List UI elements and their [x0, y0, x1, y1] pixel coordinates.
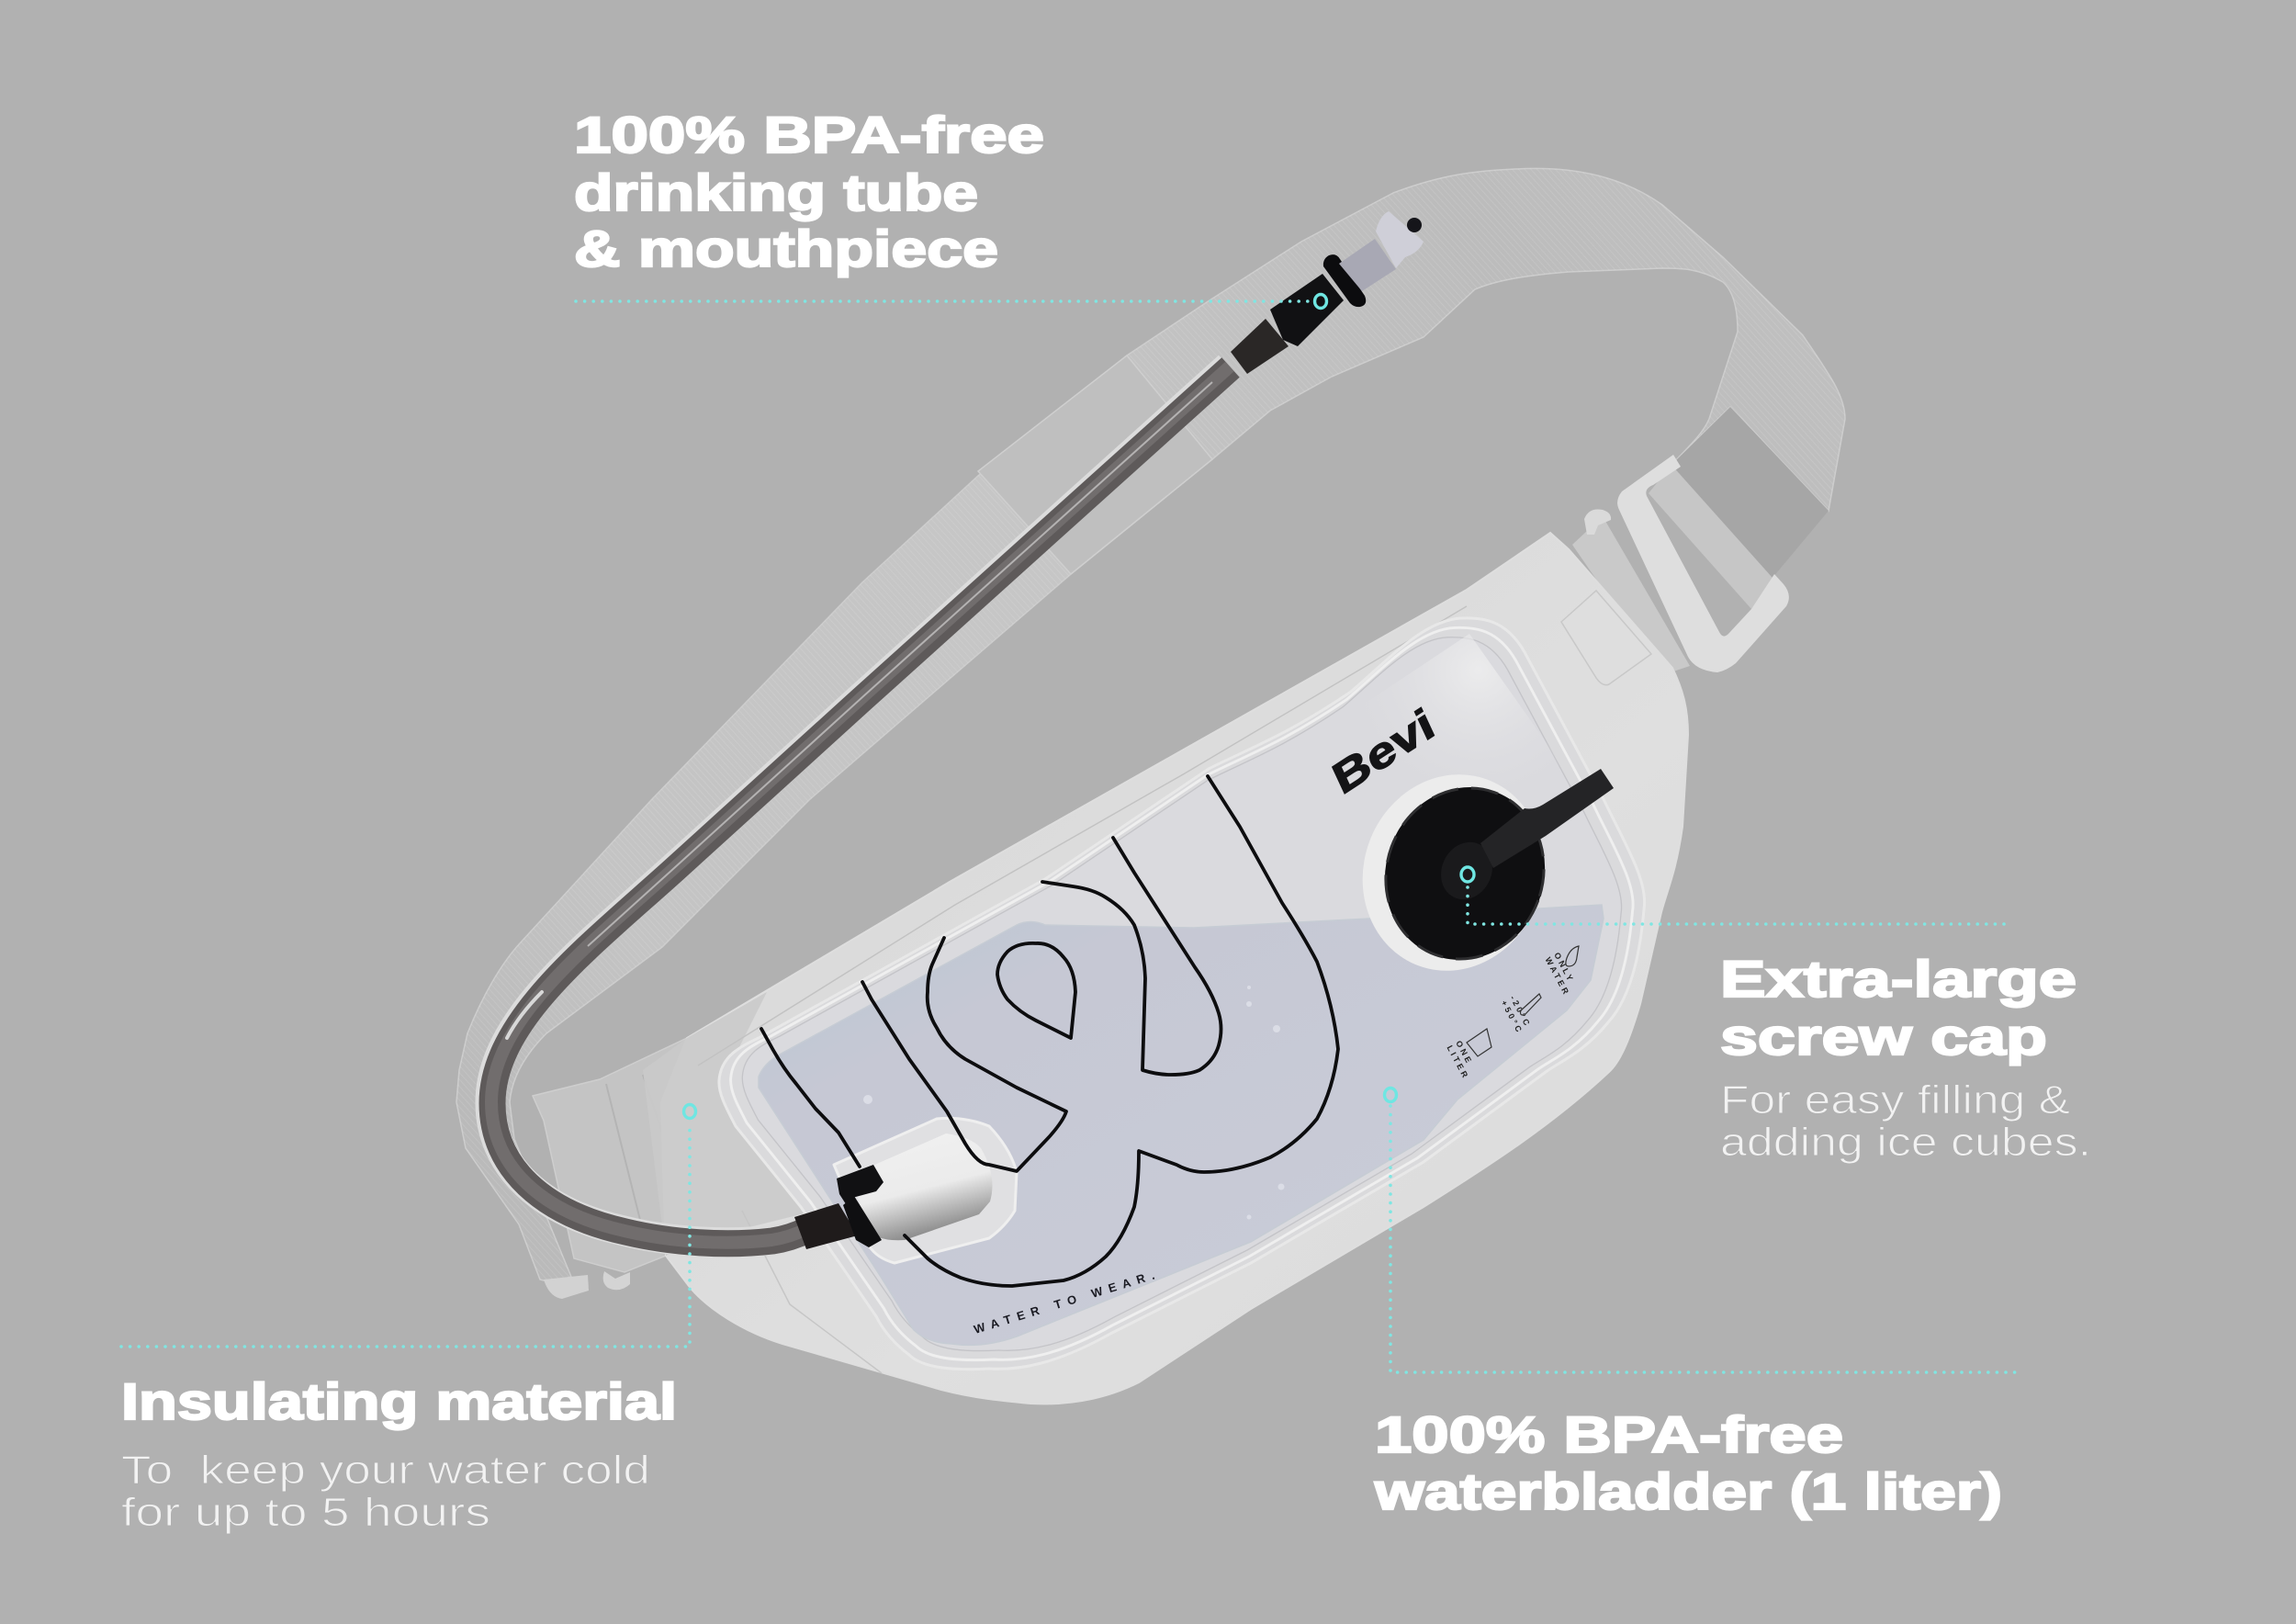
leader line	[576, 299, 1308, 303]
heading: Insulating material	[121, 1372, 677, 1430]
one liter: LITER	[1446, 1043, 1471, 1081]
Bevi logo: Bevi	[1325, 698, 1441, 804]
icon: measuring cup	[1467, 1029, 1491, 1056]
lower seam line	[742, 1211, 882, 1373]
icon: water drop	[1566, 946, 1579, 966]
marker	[683, 1104, 696, 1119]
icon: thermometer	[1521, 994, 1541, 1015]
waterbladder pocket	[719, 618, 1645, 1370]
heading line two: screw cap	[1720, 1008, 2047, 1066]
callout: insulating material	[121, 1104, 696, 1430]
top mouthpiece connector	[1231, 211, 1424, 374]
left side strap section and buckles	[533, 992, 808, 1299]
heading line three: & mouthpiece	[574, 220, 998, 277]
marker	[1461, 867, 1474, 882]
leader line	[121, 1124, 690, 1347]
white port lid	[834, 1118, 1017, 1263]
adjuster panel and buckle	[1572, 407, 1829, 675]
pocket rib inner	[742, 637, 1622, 1351]
heading: Extra-large	[1720, 950, 2077, 1008]
cap handle	[1480, 769, 1614, 868]
leader line	[1468, 887, 2007, 924]
W logo outline	[761, 776, 1338, 1286]
strap slider loop	[978, 355, 1212, 574]
bladder markings	[1446, 946, 1581, 1081]
body text: To keep your water cold	[121, 1448, 650, 1493]
leader line	[1390, 1106, 2016, 1372]
rear transparent side panel	[643, 992, 808, 1256]
heading: 100% BPA-free	[574, 106, 1044, 164]
callout: drinking tube	[574, 106, 1326, 309]
one liter: ONE	[1454, 1039, 1474, 1066]
lower tube connector	[794, 1165, 884, 1249]
tagline: water to wear: WATER TO WEAR.	[972, 1269, 1156, 1336]
body text line two: adding ice cubes.	[1720, 1120, 2091, 1165]
right side tab	[1561, 591, 1651, 685]
heading line two: waterbladder (1 liter)	[1374, 1462, 2002, 1520]
callout: waterbladder	[1375, 1088, 2016, 1463]
upper seam line	[698, 606, 1467, 1066]
belt strap	[456, 168, 1845, 1282]
temperature range: +50°C	[1500, 998, 1525, 1036]
temperature range: -20°C	[1508, 994, 1533, 1030]
water	[759, 905, 1604, 1345]
marker	[1315, 294, 1326, 309]
heading: 100% BPA-free	[1375, 1405, 1843, 1463]
only water: WATER	[1544, 955, 1571, 998]
body text line two: for up to 5 hours	[121, 1490, 490, 1535]
body text: For easy filling &	[1720, 1077, 2070, 1122]
waist pack body	[643, 533, 1688, 1404]
heading line two: drinking tube	[574, 164, 978, 221]
drinking tube	[490, 367, 1231, 1244]
only water: ONLY	[1552, 951, 1576, 985]
screw cap	[1335, 749, 1614, 997]
water bubbles	[863, 986, 1284, 1220]
pocket rib	[731, 627, 1633, 1360]
callout: screw cap	[1461, 867, 2077, 1008]
upper highlight	[1332, 634, 1580, 808]
marker	[1385, 1088, 1396, 1102]
